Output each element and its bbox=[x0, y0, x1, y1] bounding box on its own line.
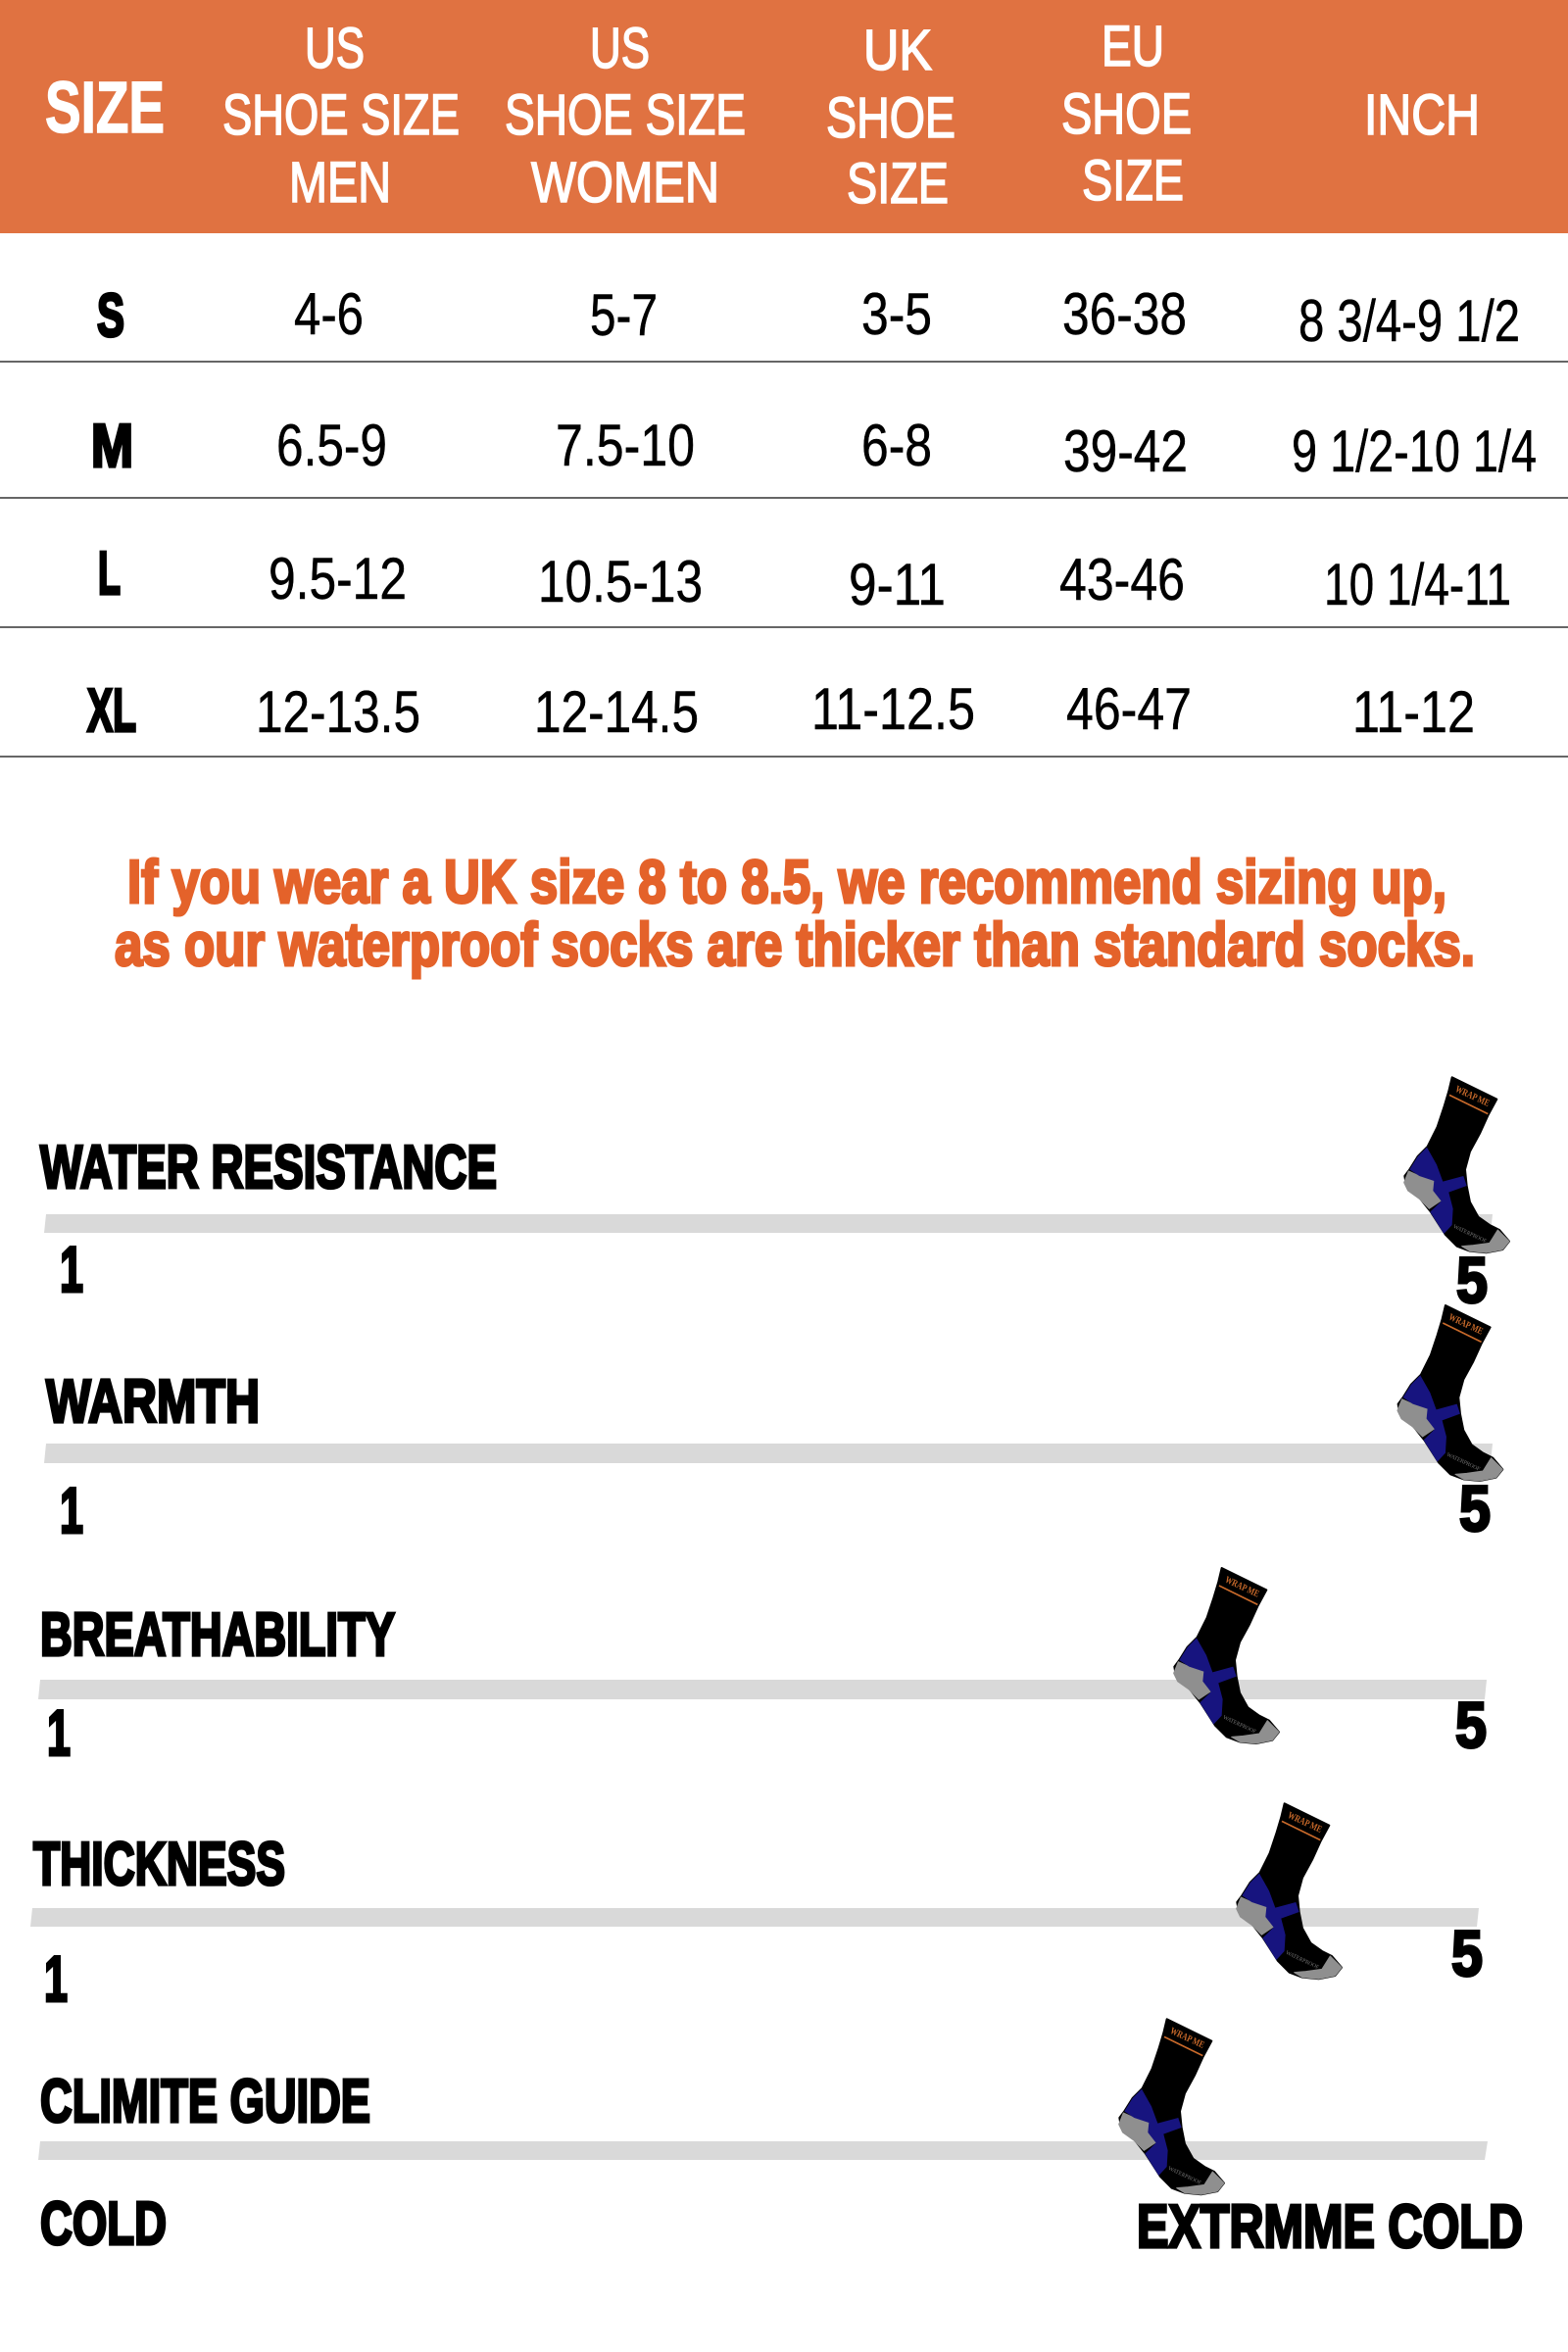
heading: EU shoe size: SHOE bbox=[1061, 82, 1192, 146]
label: breathability: BREATHABILITY bbox=[40, 1601, 395, 1669]
heading: US shoe size men bbox=[222, 17, 460, 215]
scale bar: climate guide bbox=[38, 2141, 1488, 2160]
rating: breathability bbox=[38, 1568, 1487, 1769]
table row: M: 39-42 bbox=[1063, 418, 1188, 484]
scale minimum: 1 bbox=[60, 1233, 83, 1305]
heading: EU shoe size bbox=[1061, 15, 1192, 213]
table row: XL bbox=[0, 676, 1568, 758]
scale minimum: 1 bbox=[44, 1942, 68, 2015]
icon: sock marker bbox=[1174, 1568, 1279, 1743]
table row: S bbox=[0, 281, 1568, 363]
table row: L: 43-46 bbox=[1059, 547, 1185, 612]
heading: US shoe size women: WOMEN bbox=[531, 151, 719, 215]
icon: sock marker: WRAP ME bbox=[1286, 1810, 1324, 1836]
icon: sock marker bbox=[1237, 1803, 1342, 1979]
table row: XL: 46-47 bbox=[1066, 676, 1192, 742]
table row: L: 9.5-12 bbox=[269, 546, 407, 612]
table row: XL: 11-12 bbox=[1352, 679, 1475, 745]
heading: UK shoe size: UK bbox=[863, 19, 932, 82]
table row: L: 10.5-13 bbox=[538, 549, 703, 614]
scale maximum: 5 bbox=[1451, 1917, 1483, 1989]
scale bar: thickness bbox=[30, 1908, 1479, 1927]
scale bar: warmth bbox=[44, 1444, 1493, 1463]
icon: sock marker bbox=[1404, 1077, 1509, 1252]
scale maximum: 5 bbox=[1456, 1244, 1488, 1316]
icon: sock marker: WATERPROOF bbox=[1222, 1715, 1257, 1736]
heading: UK shoe size bbox=[826, 19, 956, 216]
callout: sizing recommendation bbox=[115, 849, 1475, 979]
table row: L: L bbox=[98, 540, 121, 608]
label: climate guide: CLIMITE GUIDE bbox=[40, 2068, 370, 2135]
icon: sock marker: WATERPROOF bbox=[1167, 2166, 1202, 2186]
icon: sock marker: WATERPROOF bbox=[1446, 1452, 1481, 1473]
icon: sock marker: WRAP ME bbox=[1223, 1575, 1261, 1600]
label: warmth: WARMTH bbox=[46, 1368, 260, 1436]
heading: US shoe size women: US bbox=[590, 17, 650, 80]
scale maximum: 5 bbox=[1455, 1689, 1487, 1761]
table row: S: 3-5 bbox=[861, 281, 932, 347]
panel: table header bbox=[0, 0, 1568, 233]
rating: warmth bbox=[44, 1305, 1502, 1546]
table row: M: 6.5-9 bbox=[276, 413, 387, 478]
table row: S: 36-38 bbox=[1062, 281, 1187, 347]
table row: S: S bbox=[97, 282, 124, 350]
table row: M: 6-8 bbox=[861, 413, 932, 478]
table row: M: 7.5-10 bbox=[556, 413, 695, 478]
icon: sock marker: WRAP ME bbox=[1446, 1312, 1485, 1338]
table row: XL: 11-12.5 bbox=[811, 676, 975, 742]
heading: size: SIZE bbox=[45, 67, 165, 148]
heading: US shoe size men: SHOE SIZE bbox=[222, 83, 460, 147]
table row: XL: XL bbox=[87, 677, 136, 745]
heading: US shoe size women bbox=[505, 17, 746, 215]
heading: US shoe size men: US bbox=[305, 17, 365, 80]
scale minimum: 1 bbox=[47, 1696, 71, 1769]
heading: US shoe size men: MEN bbox=[289, 151, 391, 215]
label: thickness: THICKNESS bbox=[33, 1831, 285, 1898]
scale bar: water resistance bbox=[44, 1214, 1493, 1233]
rating: climate guide bbox=[38, 2019, 1523, 2261]
icon: sock marker: WRAP ME bbox=[1168, 2026, 1206, 2051]
icon: sock marker: WRAP ME bbox=[1453, 1084, 1492, 1109]
table row: XL: 12-13.5 bbox=[256, 679, 420, 745]
table row: M: M bbox=[91, 413, 133, 480]
icon: sock marker bbox=[1397, 1305, 1502, 1481]
heading: EU shoe size: EU bbox=[1102, 15, 1164, 78]
table row: L bbox=[0, 540, 1568, 628]
rating: water resistance bbox=[40, 1077, 1509, 1316]
table row: L: 9-11 bbox=[849, 552, 946, 617]
icon: sock marker bbox=[1119, 2019, 1224, 2194]
heading: US shoe size women: SHOE SIZE bbox=[505, 83, 746, 147]
label: water resistance: WATER RESISTANCE bbox=[40, 1134, 497, 1201]
rating: thickness bbox=[30, 1803, 1483, 2015]
heading: EU shoe size: SIZE bbox=[1082, 149, 1184, 213]
scale maximum: 5 bbox=[1459, 1472, 1491, 1544]
icon: sock marker: WATERPROOF bbox=[1285, 1950, 1320, 1971]
table row: XL: 12-14.5 bbox=[534, 679, 699, 745]
heading: UK shoe size: SIZE bbox=[847, 152, 949, 216]
icon: sock marker: WATERPROOF bbox=[1452, 1224, 1488, 1245]
heading: inch: INCH bbox=[1364, 83, 1480, 147]
scale bar: breathability bbox=[38, 1680, 1487, 1699]
table row: L: 10 1/4-11 bbox=[1324, 552, 1511, 617]
scale minimum: COLD bbox=[40, 2190, 167, 2258]
table row: S: 4-6 bbox=[294, 281, 364, 347]
heading: UK shoe size: SHOE bbox=[826, 86, 956, 150]
scale minimum: 1 bbox=[60, 1474, 83, 1546]
table row: M bbox=[0, 413, 1568, 499]
table row: S: 5-7 bbox=[590, 282, 658, 348]
